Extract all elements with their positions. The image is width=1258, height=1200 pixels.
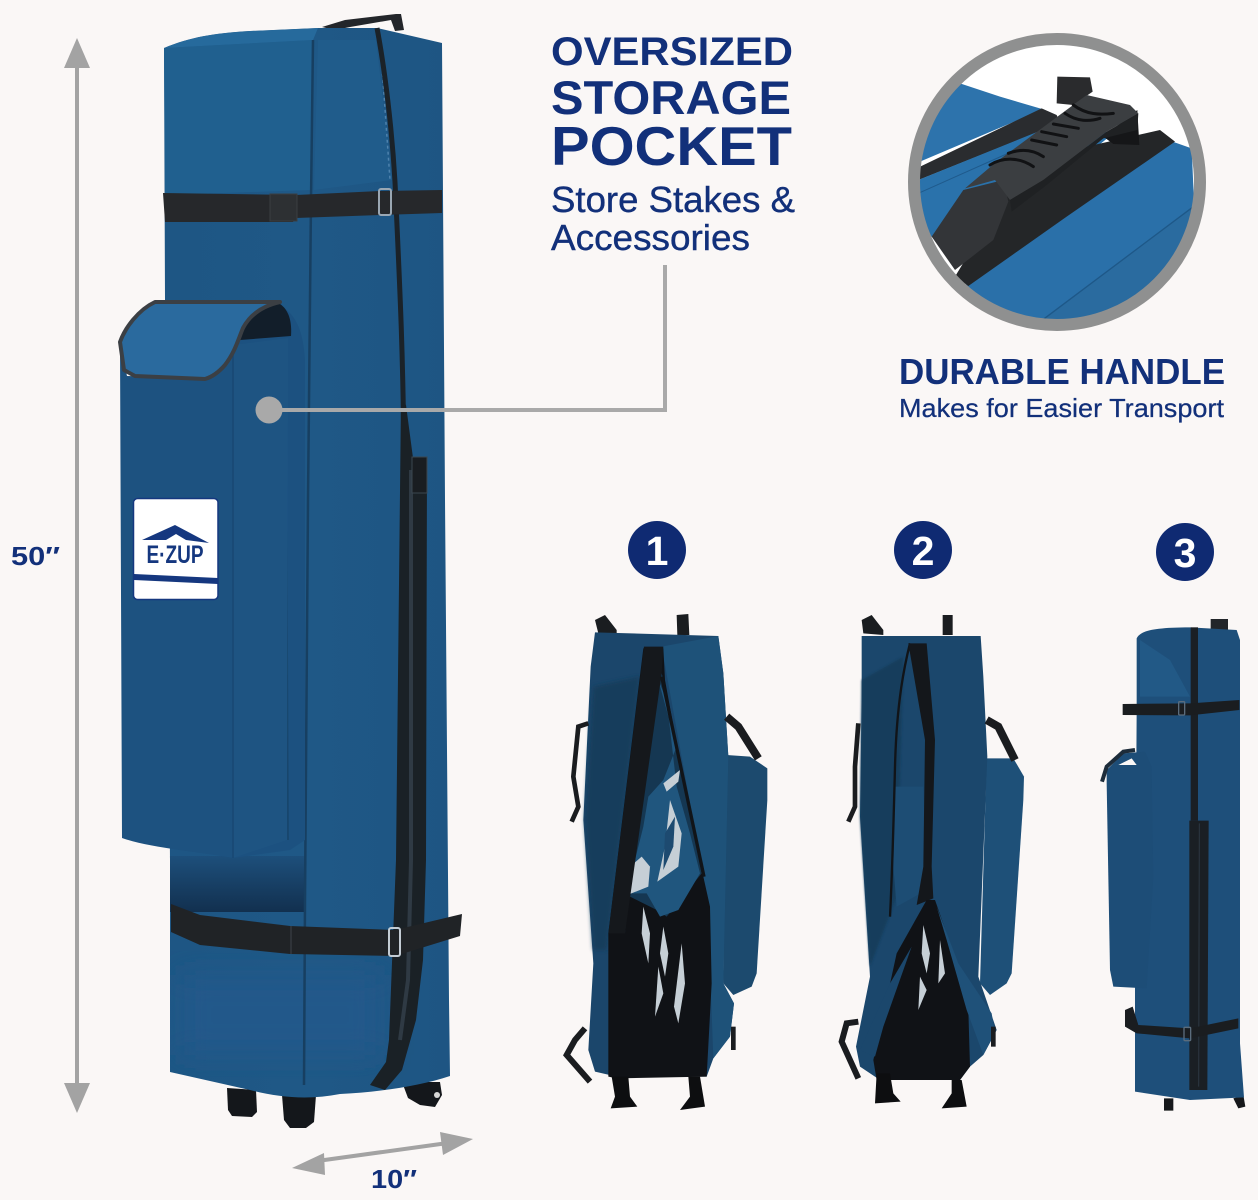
upper strap <box>1123 700 1239 715</box>
callout dot <box>256 396 282 424</box>
heading: oversized storage pocket: OVERSIZED <box>551 30 793 74</box>
E-Z UP logo patch <box>134 498 218 600</box>
height dimension arrow <box>64 38 90 1113</box>
upper interior fabric <box>625 650 702 933</box>
callout leader line <box>256 265 665 424</box>
zipper band in detail <box>917 108 1060 179</box>
front fabric <box>966 142 1194 318</box>
grip slots <box>990 105 1113 167</box>
step badge 3: 3 <box>1174 530 1196 576</box>
grip front edge <box>1011 113 1138 200</box>
side pocket <box>723 755 767 995</box>
back fabric <box>913 83 1043 162</box>
step 3 bag, closed <box>1102 619 1245 1111</box>
woven black band <box>955 130 1175 286</box>
step badge 2 <box>894 521 952 579</box>
pocket front panel <box>120 345 233 858</box>
zipper pull <box>412 457 427 493</box>
heading: oversized storage pocket: STORAGE <box>551 71 791 124</box>
right panel <box>662 636 734 1058</box>
heading: durable handle: DURABLE HANDLE <box>899 351 1225 392</box>
blue zipper flap <box>920 132 1106 237</box>
gray ring <box>914 39 1200 325</box>
frame legs <box>875 1073 967 1108</box>
subheading: store stakes and accessories: Accessories <box>551 217 750 258</box>
handle detail circle <box>913 39 1200 337</box>
step badge 1 <box>628 521 686 579</box>
top tab <box>1211 619 1228 632</box>
lower strap buckle <box>389 928 400 956</box>
silver canopy highlights <box>918 925 945 1010</box>
side pocket <box>980 758 1024 995</box>
pocket flap <box>120 302 280 379</box>
bag shell <box>583 632 734 1077</box>
pocket flap opening <box>1118 758 1137 765</box>
step badge 1: 1 <box>646 528 668 574</box>
silver canopy highlights <box>627 770 685 1023</box>
inner fabric <box>627 680 700 917</box>
shadow under pocket <box>165 856 305 912</box>
zipper stitch <box>380 38 390 180</box>
back loop <box>1057 77 1093 105</box>
subheading: makes for easier transport: Makes for Easier Transport <box>899 393 1225 423</box>
pocket gusset <box>233 305 305 858</box>
width dimension arrow <box>292 1132 473 1175</box>
pocket side panel <box>233 338 288 858</box>
top tabs <box>595 614 689 635</box>
pocket opening shadow <box>240 304 291 340</box>
logo house <box>142 525 209 543</box>
top carry handle <box>322 14 404 31</box>
side pocket <box>1107 752 1153 988</box>
label: 50 inch height: 50″ <box>11 541 60 571</box>
step 1 bag, fully open <box>567 614 767 1110</box>
handle grip <box>965 95 1138 200</box>
front flap over frame <box>937 907 995 1055</box>
label: 10 inch width: 10″ <box>371 1164 417 1194</box>
subheading: store stakes and accessories <box>551 179 795 258</box>
lower strap <box>171 904 462 956</box>
upper strap buckle <box>379 189 391 215</box>
frame reveal <box>873 900 970 1080</box>
bag shell <box>856 636 997 1080</box>
bag body <box>164 28 450 1097</box>
zipper <box>377 28 404 460</box>
step 2 bag, partly zipped <box>842 615 1024 1108</box>
zipper band <box>608 647 663 933</box>
top tabs <box>862 615 953 635</box>
hanging straps <box>842 720 1015 1078</box>
hanging straps <box>567 717 758 1082</box>
rear wheels and feet <box>227 1082 442 1128</box>
heading: oversized storage pocket <box>551 30 793 177</box>
bag shell <box>1135 627 1244 1100</box>
lower strap <box>1125 1007 1238 1038</box>
left shadow fold <box>585 677 640 950</box>
panel seam <box>304 40 313 1085</box>
bottom wheels <box>1164 1095 1245 1111</box>
main rolling bag <box>120 14 462 1128</box>
blue fold over silver <box>663 817 675 870</box>
right zipper line <box>662 677 704 877</box>
opening, dark interior <box>608 648 712 1078</box>
upper strap <box>163 190 442 222</box>
step badge 3 <box>1156 523 1214 581</box>
step badge 2: 2 <box>912 528 934 574</box>
heading: oversized storage pocket: POCKET <box>551 115 792 177</box>
rear handle mount <box>1103 110 1139 145</box>
logo wordmark: E·ZUP <box>146 541 204 569</box>
subheading: store stakes and accessories: Store Stakes & <box>551 179 795 220</box>
frame legs <box>611 1077 705 1110</box>
storage pocket <box>120 302 305 858</box>
webbing strap <box>932 180 1008 270</box>
zipper seam <box>890 643 910 917</box>
zipper <box>1191 627 1198 821</box>
